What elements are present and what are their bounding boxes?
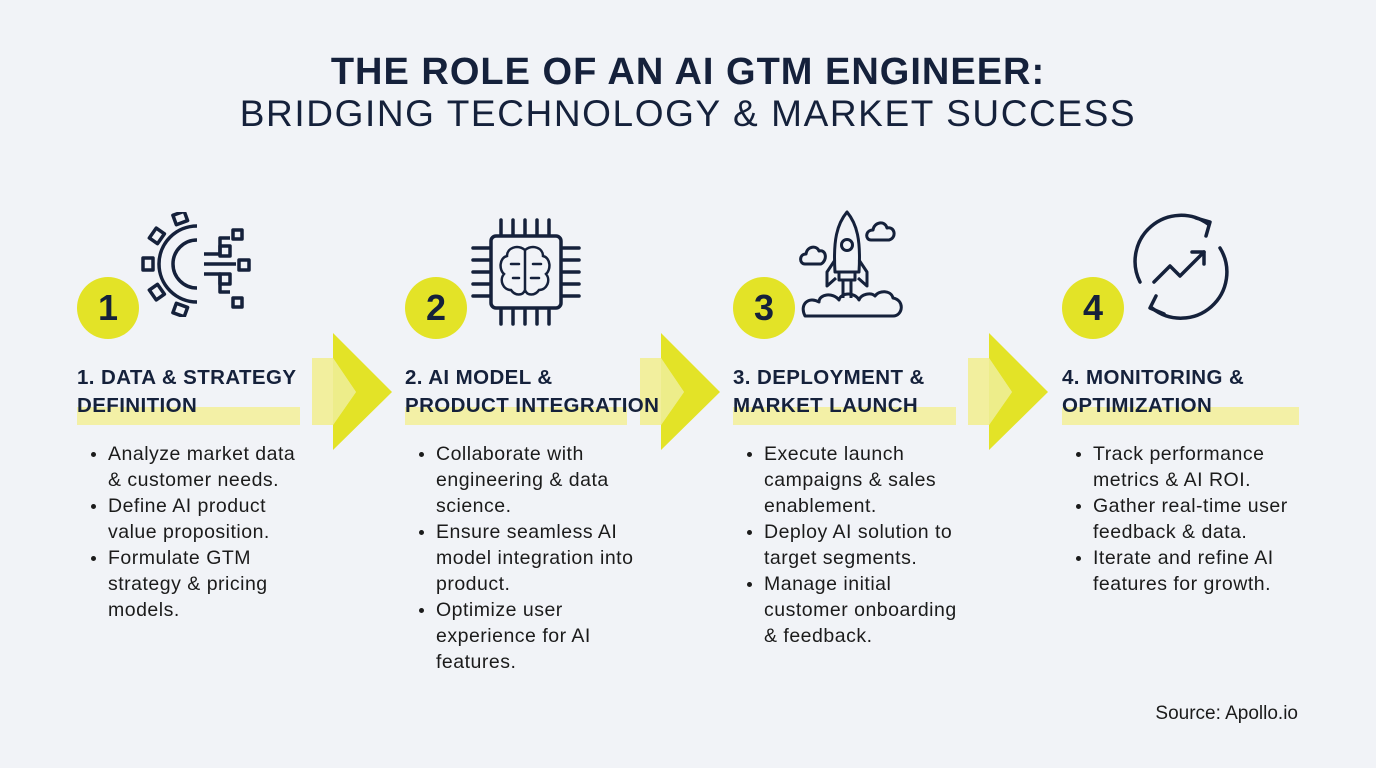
bullets 1: & customer needs.	[108, 469, 279, 491]
step 4	[1062, 214, 1299, 595]
bullets 3: Manage initial	[764, 573, 891, 595]
step 2	[405, 218, 659, 673]
heading 3	[733, 366, 925, 417]
bullets 4: Gather real-time user	[1093, 495, 1288, 517]
bullets 4: Track performance	[1093, 443, 1264, 465]
source note: Source: Apollo.io	[1155, 703, 1298, 724]
heading 2	[405, 366, 659, 417]
step 1	[77, 212, 300, 621]
bullets 3: customer onboarding	[764, 599, 957, 621]
icon: gear with circuit	[141, 212, 251, 317]
title: BRIDGING TECHNOLOGY & MARKET SUCCESS	[240, 93, 1136, 134]
heading 4	[1062, 366, 1244, 417]
bullets 1: value proposition.	[108, 521, 270, 543]
heading 4: 4. MONITORING &	[1062, 366, 1244, 389]
arrow 1	[312, 333, 392, 450]
number badge 4	[1062, 277, 1124, 339]
bullets 3: & feedback.	[764, 625, 872, 647]
bullets 1: Formulate GTM	[108, 547, 251, 569]
number badge 2: 2	[426, 287, 446, 328]
bullets 4	[1076, 443, 1288, 595]
bullets 1	[91, 443, 295, 621]
icon: rocket launch	[799, 210, 903, 318]
highlight bar	[1062, 407, 1299, 425]
heading 1	[77, 366, 296, 417]
title: THE ROLE OF AN AI GTM ENGINEER:	[331, 51, 1045, 93]
bullets 2: features.	[436, 651, 516, 673]
heading 3: 3. DEPLOYMENT &	[733, 366, 925, 389]
bullets 3	[747, 443, 957, 647]
number badge 2	[405, 277, 467, 339]
bullets 1: strategy & pricing	[108, 573, 268, 595]
icon: refresh growth	[1133, 214, 1229, 320]
bullets 2: Ensure seamless AI	[436, 521, 617, 543]
bullets 2: science.	[436, 495, 512, 517]
bullets 3: enablement.	[764, 495, 877, 517]
bullets 2: model integration into	[436, 547, 633, 569]
bullets 2: Optimize user	[436, 599, 563, 621]
bullets 1: Define AI product	[108, 495, 266, 517]
bullets 4: Iterate and refine AI	[1093, 547, 1274, 569]
bullets 2: experience for AI	[436, 625, 591, 647]
bullets 3: campaigns & sales	[764, 469, 936, 491]
number badge 3	[733, 277, 795, 339]
bullets 4: metrics & AI ROI.	[1093, 469, 1251, 491]
heading 4: OPTIMIZATION	[1062, 394, 1212, 417]
highlight bar	[405, 407, 627, 425]
number badge 4: 4	[1083, 287, 1103, 328]
bullets 1: Analyze market data	[108, 443, 295, 465]
icon: AI chip brain	[471, 218, 581, 326]
bullets 2	[419, 443, 633, 673]
number badge 3: 3	[754, 287, 774, 328]
bullets 3: Execute launch	[764, 443, 904, 465]
bullets 2: engineering & data	[436, 469, 609, 491]
arrow 2	[640, 333, 720, 450]
arrow 3	[968, 333, 1048, 450]
bullets 2: Collaborate with	[436, 443, 584, 465]
bullets 4: feedback & data.	[1093, 521, 1247, 543]
bullets 3: Deploy AI solution to	[764, 521, 952, 543]
number badge 1: 1	[98, 287, 118, 328]
step 3	[733, 210, 957, 647]
title	[240, 51, 1136, 134]
bullets 1: models.	[108, 599, 180, 621]
heading 1: 1. DATA & STRATEGY	[77, 366, 296, 389]
highlight bar	[77, 407, 300, 425]
number badge 1	[77, 277, 139, 339]
bullets 3: target segments.	[764, 547, 917, 569]
heading 2: PRODUCT INTEGRATION	[405, 394, 659, 417]
bullets 4: features for growth.	[1093, 573, 1271, 595]
highlight bar	[733, 407, 956, 425]
heading 3: MARKET LAUNCH	[733, 394, 918, 417]
bullets 2: product.	[436, 573, 510, 595]
heading 2: 2. AI MODEL &	[405, 366, 553, 389]
heading 1: DEFINITION	[77, 394, 197, 417]
